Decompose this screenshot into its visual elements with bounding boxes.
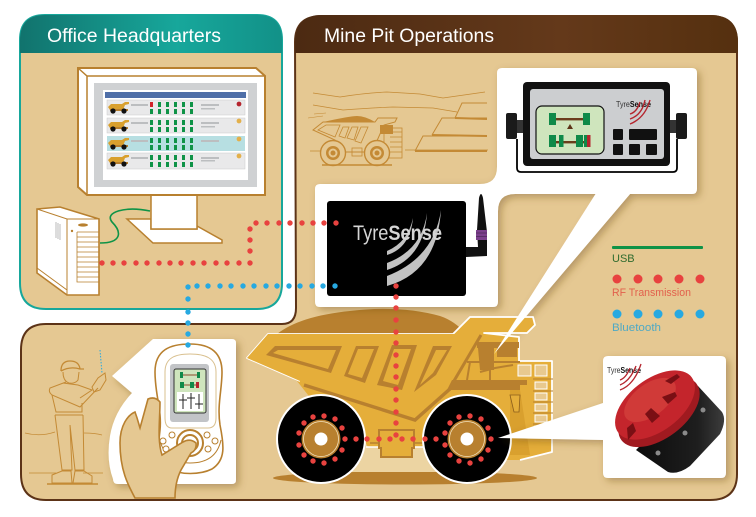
illustration: mine truck xyxy=(247,317,553,484)
legend: USB xyxy=(612,253,635,265)
illustration: computer tower xyxy=(37,207,99,295)
mine pit header xyxy=(295,15,738,53)
callout: white panels for receiver and display xyxy=(315,68,697,354)
connector: rf transmission from office to receiver xyxy=(99,220,339,266)
illustration: hand xyxy=(120,398,196,498)
callout: handheld panel xyxy=(109,339,236,484)
illustration: computer monitor xyxy=(78,68,265,243)
illustration: tyresense receiver xyxy=(327,194,487,296)
illustration: dashboard display unit xyxy=(506,82,687,172)
illustration: worker sketch xyxy=(25,350,106,484)
logo: tyresense small sensor: TyreSense xyxy=(607,366,641,375)
illustration: dirt load and ground shadow xyxy=(273,309,537,484)
heading: office headquarters: Office Headquarters xyxy=(47,26,221,47)
callout: sensor panel xyxy=(498,356,726,478)
panel: office headquarters xyxy=(20,15,282,309)
illustration: tyre sensor xyxy=(603,357,724,473)
connector: bluetooth from handheld to receiver xyxy=(185,283,338,348)
office header xyxy=(20,15,282,53)
connector: rf transmission through truck and wheels xyxy=(296,283,494,466)
illustration: handheld reader xyxy=(120,344,223,498)
logo: tyresense small display xyxy=(616,100,651,124)
legend: RF Transmission xyxy=(612,287,691,299)
icon: usb cable xyxy=(100,209,150,243)
legend xyxy=(612,246,704,334)
legend: Bluetooth xyxy=(612,322,661,334)
logo: tyresense small display: TyreSense xyxy=(616,100,651,109)
arrow: display callout pointer xyxy=(494,190,630,354)
heading: mine pit operations: Mine Pit Operations xyxy=(324,26,494,47)
logo: tyresense large: TyreSense xyxy=(353,222,442,245)
illustration: background truck and pit sketch xyxy=(308,92,488,166)
